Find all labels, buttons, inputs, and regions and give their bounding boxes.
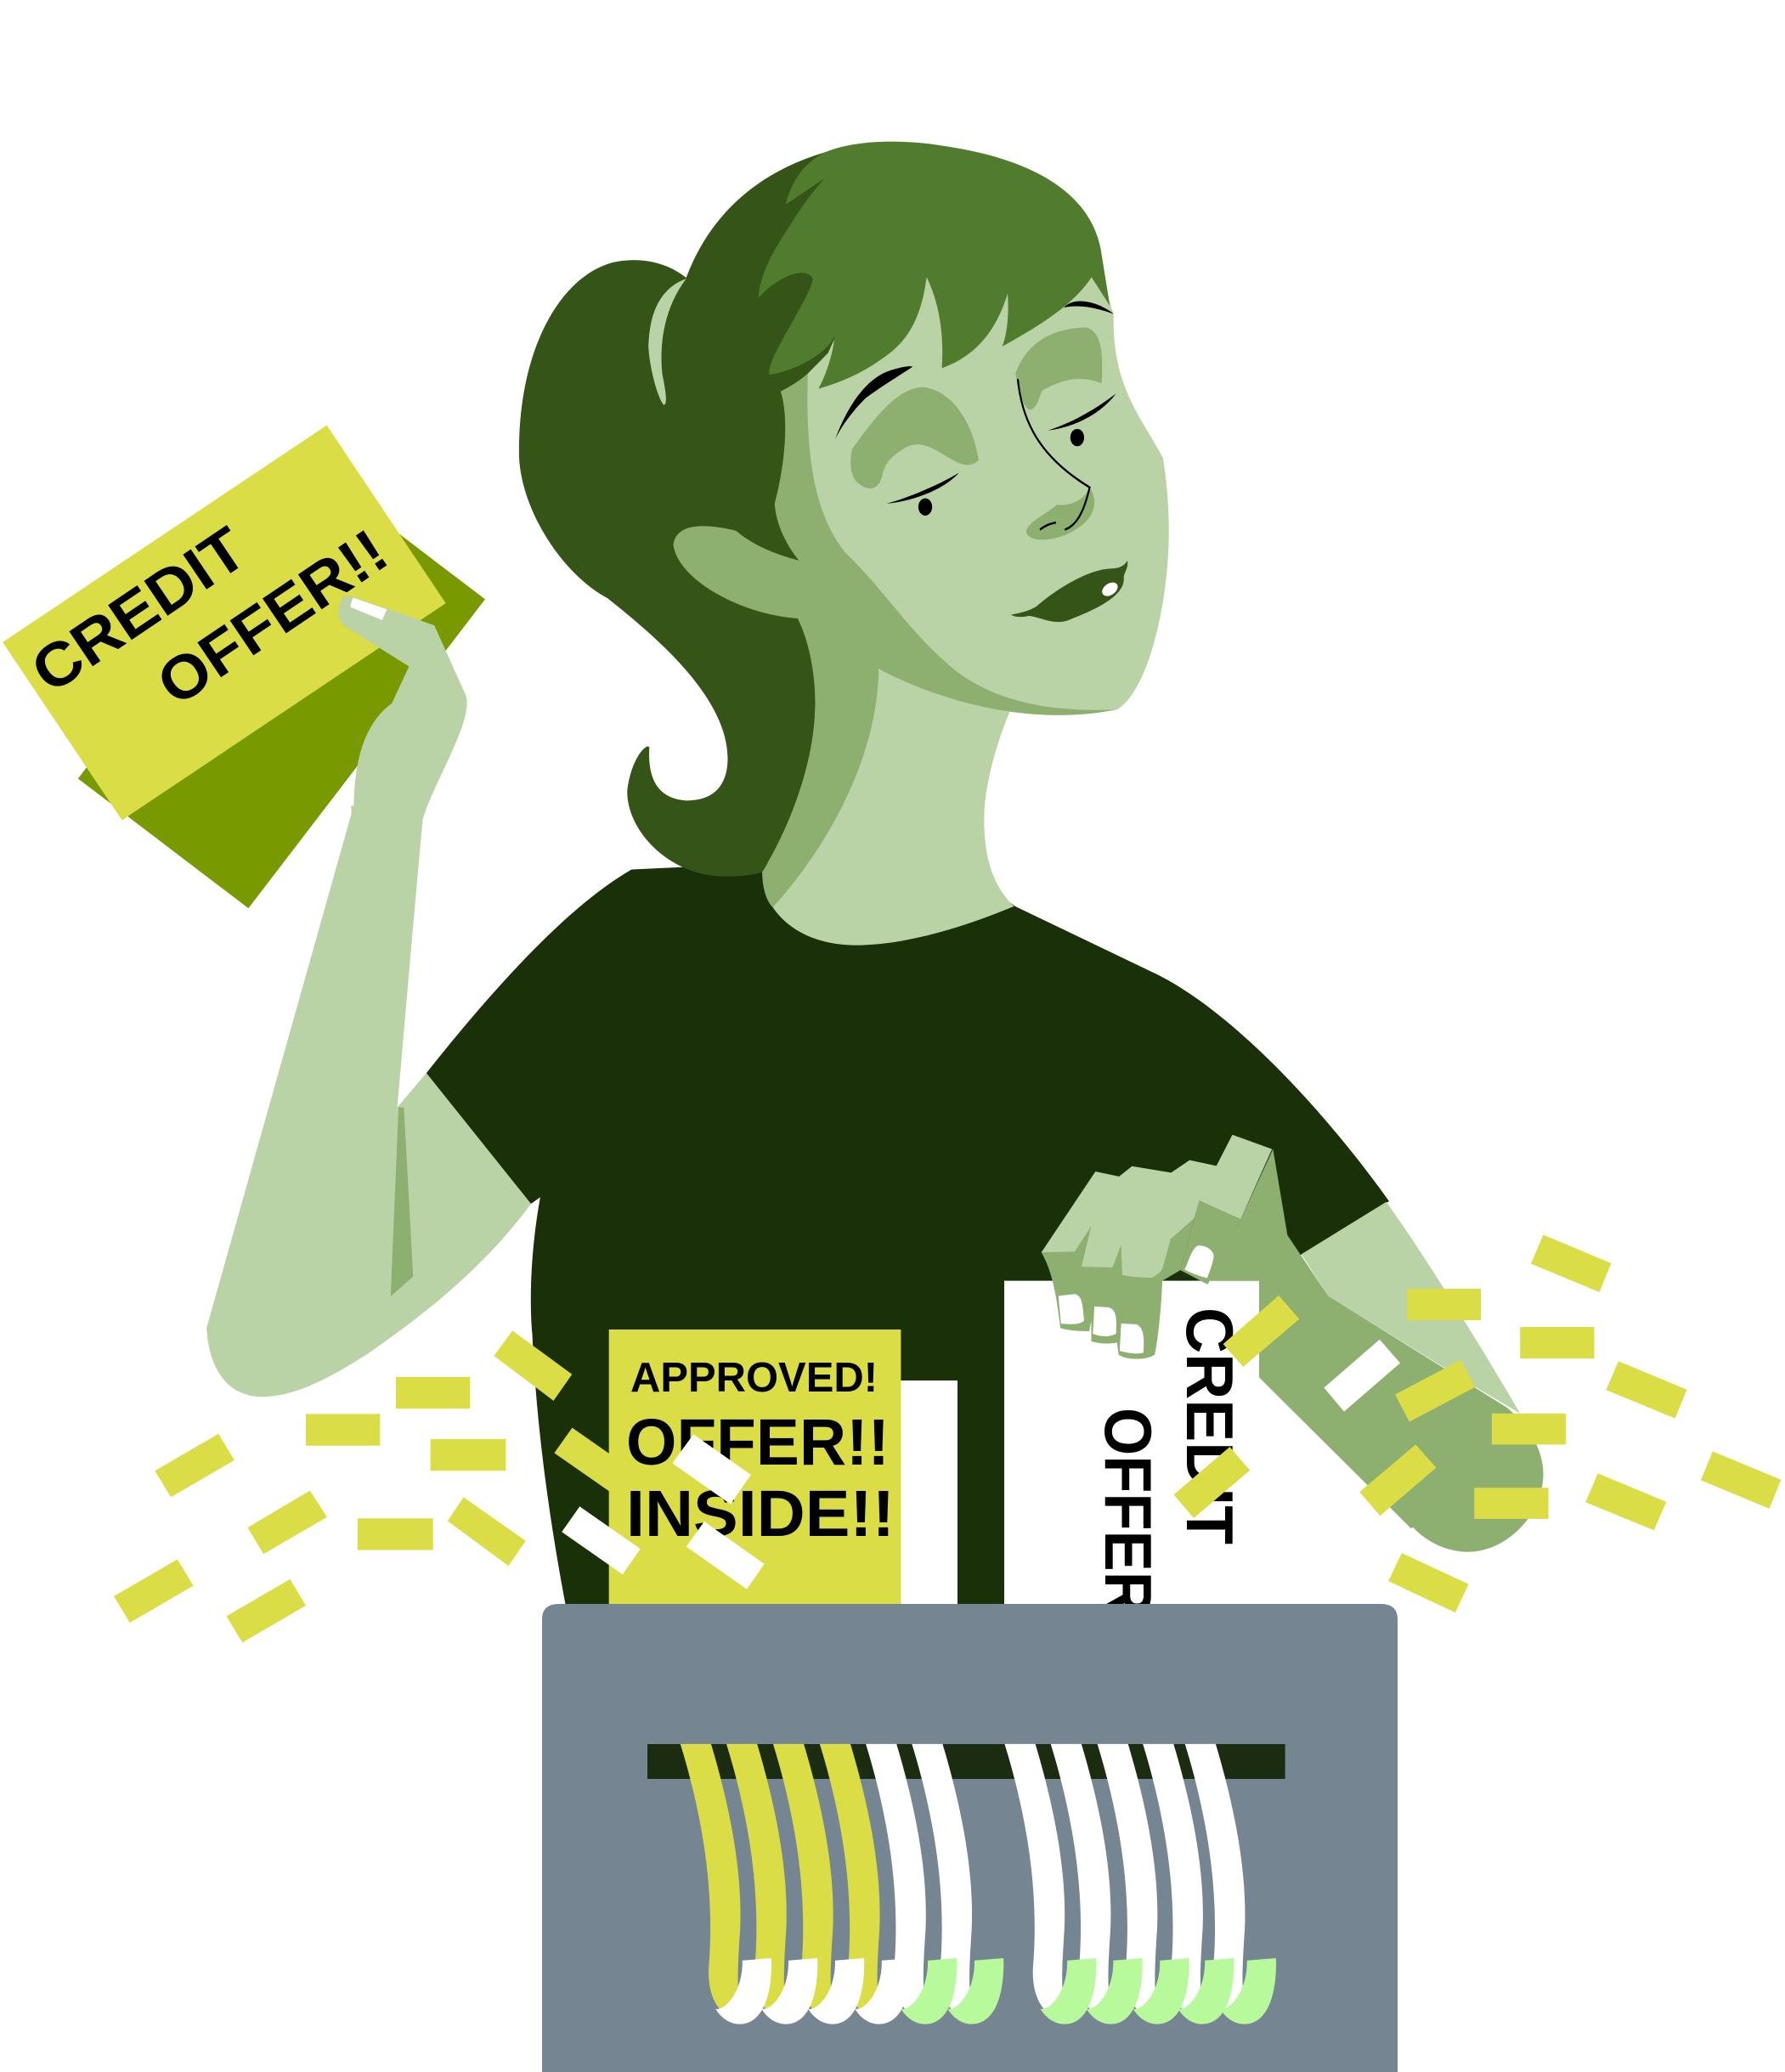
lips — [1011, 561, 1127, 622]
shredded confetti right — [1173, 1235, 1781, 1612]
fingernail one — [1059, 1294, 1084, 1324]
upper arm — [206, 806, 531, 1397]
dark hair and ponytail — [519, 153, 861, 877]
letter text: approved: APPROVED! — [630, 1355, 878, 1401]
raised credit offer card — [3, 426, 485, 908]
hair bangs — [759, 142, 1110, 389]
paper strips — [681, 1744, 1276, 2024]
card front — [3, 426, 446, 821]
left eye — [918, 498, 932, 516]
shirt — [426, 793, 1389, 1604]
right eyelid — [1048, 393, 1116, 431]
left arm and hand — [206, 596, 531, 1397]
thumbnail — [1184, 1245, 1214, 1278]
letter text: offer: OFFER!! — [626, 1406, 890, 1479]
ear and neck shadow — [674, 374, 1117, 907]
thumb — [1180, 1200, 1240, 1284]
upper forearm — [1302, 1202, 1520, 1414]
left eyelid — [886, 472, 959, 504]
head, hair and neck — [519, 142, 1169, 946]
right eye shadow — [1015, 328, 1102, 409]
right eye — [1070, 429, 1084, 446]
fingers — [1042, 1195, 1195, 1359]
left eyebrow — [835, 366, 912, 440]
lip highlight — [1100, 579, 1120, 599]
paper sheet — [1004, 1281, 1259, 1605]
neck — [765, 661, 1014, 946]
card text: offer: OFFER!! — [145, 517, 399, 719]
nose shadow — [1026, 488, 1094, 539]
nose line — [1018, 379, 1090, 529]
fingernail three — [1120, 1324, 1144, 1353]
paper text: credit: CREDIT — [1172, 1307, 1247, 1544]
shredder slot — [647, 1744, 1285, 1779]
shredder — [542, 1604, 1398, 2072]
thumbnail — [350, 597, 387, 620]
right eyebrow — [1064, 302, 1114, 314]
paper text: offer: OFFER — [1091, 1408, 1166, 1616]
shredded confetti left — [114, 1330, 572, 1642]
nostril — [1040, 522, 1056, 529]
left eye shadow — [850, 387, 979, 488]
right arm and hand — [1042, 1135, 1543, 1552]
letter sheet — [609, 1330, 901, 1604]
shredder body — [542, 1604, 1398, 2072]
face — [807, 254, 1169, 710]
approved offer letter — [609, 1330, 901, 1604]
hand holding card — [338, 596, 467, 934]
white credit offer paper — [1004, 1281, 1259, 1616]
shredded confetti over letter — [554, 1428, 765, 1589]
back of hand — [1042, 1135, 1272, 1278]
paper stack behind approved letter — [901, 1380, 957, 1604]
card back — [78, 470, 485, 908]
fingernail two — [1093, 1307, 1116, 1336]
letter text: inside: INSIDE!! — [626, 1477, 895, 1550]
arm shading — [391, 1108, 413, 1296]
card text: credit: CREDIT — [20, 515, 258, 706]
hair highlight — [648, 279, 686, 405]
forearm shade — [1209, 1149, 1543, 1552]
